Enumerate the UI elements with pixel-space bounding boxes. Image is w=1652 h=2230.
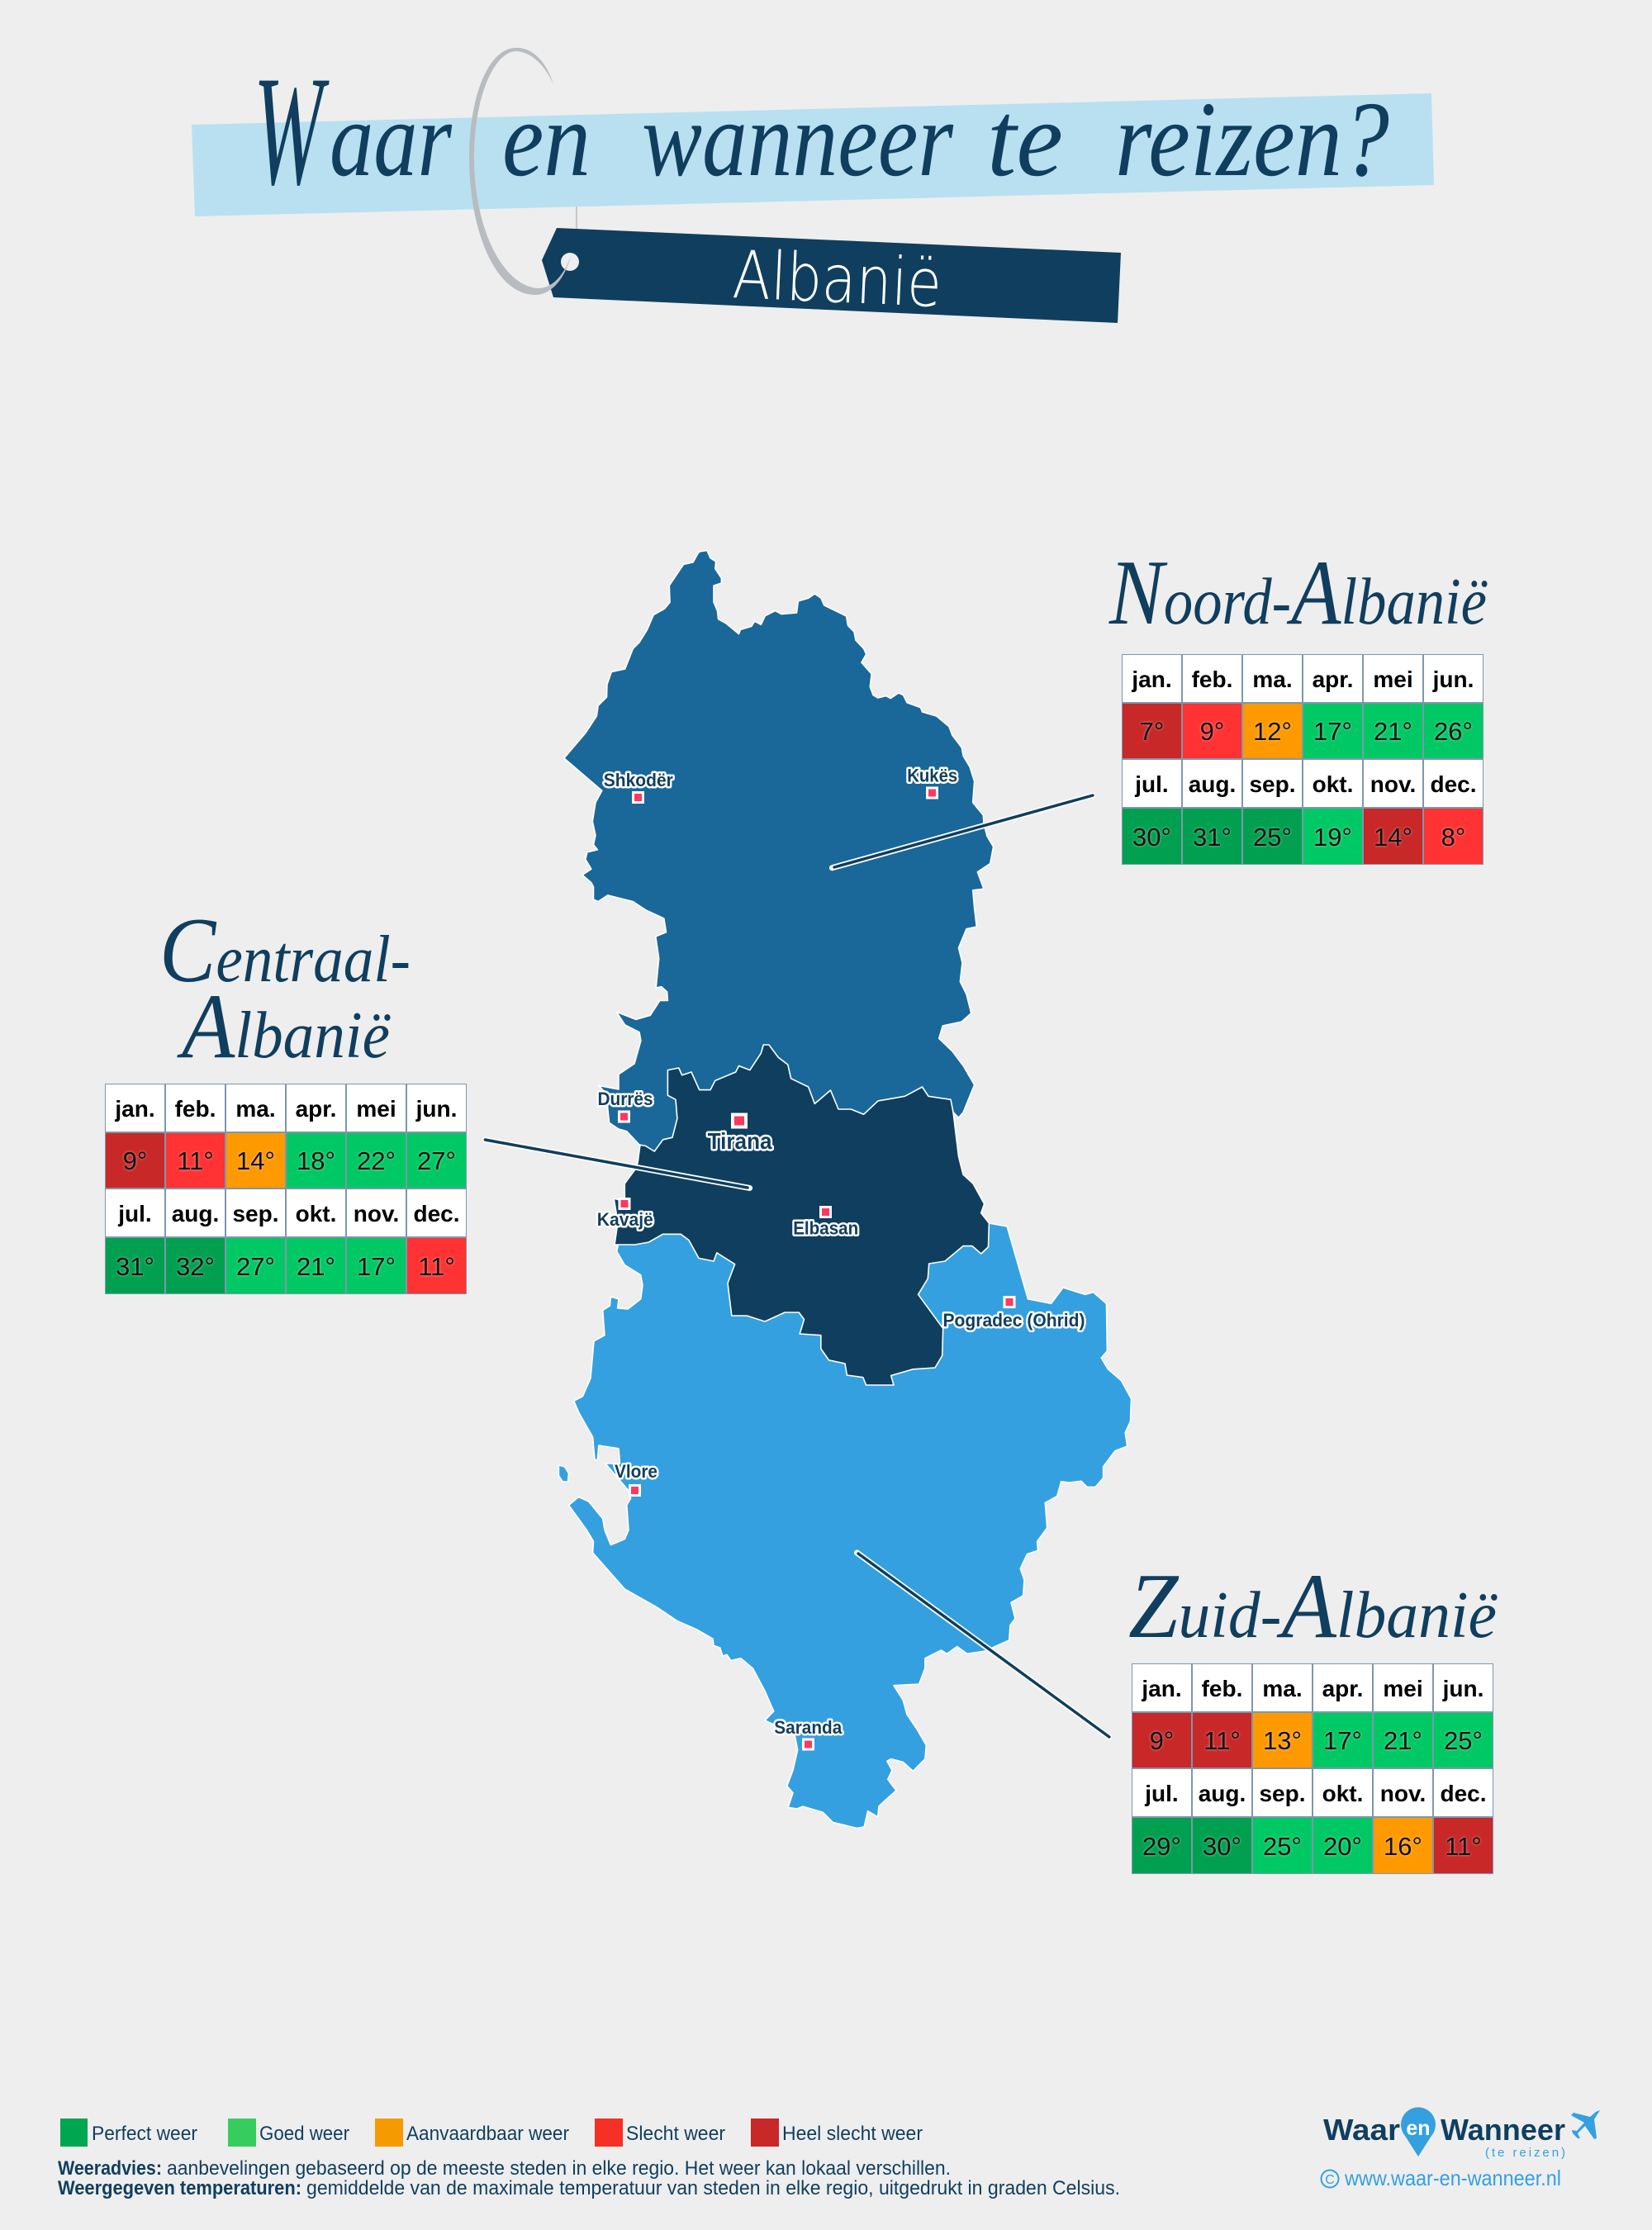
logo: Waar [1323,2113,1400,2147]
table: Centraal-Albanië: jul. [118,1201,152,1226]
city: Vlore: Vlore [615,1461,657,1482]
title banner: en [502,80,591,199]
table: Noord-Albanië: 30° [1132,823,1171,851]
table: Zuid-Albanië: okt. [1322,1781,1363,1805]
table: Noord-Albanië: jul. [1135,771,1169,796]
table: Zuid-Albanië: 11° [1203,1726,1241,1755]
city: Durrës: Durrës [598,1089,653,1109]
table: Centraal-Albanië: 17° [357,1252,396,1280]
legend item: acceptable [375,2118,569,2147]
table: Zuid-Albanië: dec. [1440,1781,1487,1805]
table: Centraal-Albanië: 27° [417,1146,456,1175]
legend item: acceptable: Aanvaardbaar weer [406,2123,569,2145]
city: Elbasan [793,1206,858,1239]
table: Noord-Albanië: nov. [1370,771,1416,796]
city: Durrës [598,1089,653,1123]
table: Noord-Albanië: ma. [1252,666,1293,692]
legend item: bad [595,2118,725,2147]
logo [1323,2107,1600,2160]
table: Noord-Albanië [1122,654,1483,865]
city: Saranda [774,1717,843,1751]
legend item: perfect: Perfect weer [92,2123,197,2145]
table: Centraal-Albanië: 32° [176,1252,215,1280]
leader line: south [857,1553,1109,1737]
legend item: perfect [60,2118,197,2147]
table: Centraal-Albanië: 27° [236,1252,275,1280]
table: Zuid-Albanië: nov. [1380,1781,1426,1805]
website: C [1325,2173,1335,2187]
table: Noord-Albanië: dec. [1430,771,1477,796]
heading: Centraal-Albanië [159,899,411,1078]
legend item: bad: Slecht weer [626,2123,725,2145]
table: Zuid-Albanië: 11° [1445,1832,1482,1860]
table: Noord-Albanië: 21° [1374,717,1412,746]
table: Noord-Albanië: jan. [1132,666,1172,692]
table: Zuid-Albanië: 9° [1150,1726,1174,1755]
icon: plane [1571,2110,1600,2139]
table: Centraal-Albanië: sep. [232,1201,279,1226]
table: Noord-Albanië: 9° [1200,717,1224,746]
table: Noord-Albanië: feb. [1192,666,1232,692]
region: north [564,550,994,1151]
city: Pogradec (Ohrid): Pogradec (Ohrid) [943,1310,1085,1331]
table: Zuid-Albanië: jun. [1443,1675,1483,1701]
heading: Centraal-Albanië: Centraal- [159,899,411,1002]
city: Shkodër [604,770,673,804]
legend [60,2118,923,2147]
heading: Zuid-Albanië: Zuid-Albanië [1128,1555,1498,1658]
table: Zuid-Albanië: ma. [1262,1675,1303,1701]
table: Centraal-Albanië: 14° [236,1146,275,1175]
heading: Centraal-Albanië: Albanië [176,975,391,1078]
table: Zuid-Albanië: mei [1383,1675,1423,1701]
table: Zuid-Albanië: 16° [1384,1832,1422,1860]
table: Centraal-Albanië: mei [356,1095,396,1122]
table: Noord-Albanië: 14° [1374,823,1412,851]
leader line: north [832,795,1093,868]
title banner [192,45,1434,218]
legend item: very bad: Heel slecht weer [782,2123,923,2145]
city: Kukës [907,765,957,799]
legend item: very bad [751,2118,923,2147]
title banner: reizen? [1115,80,1389,199]
table: Zuid-Albanië [1132,1663,1493,1874]
city: Elbasan: Elbasan [793,1217,858,1239]
table: Noord-Albanië: apr. [1313,666,1353,692]
city: Kukës: Kukës [907,765,957,786]
table: Centraal-Albanië: jun. [416,1095,457,1122]
table: Noord-Albanië: 17° [1313,717,1352,746]
table: Zuid-Albanië: jul. [1145,1781,1179,1805]
table: Centraal-Albanië: ma. [235,1095,276,1122]
table: Centraal-Albanië: 21° [297,1252,335,1280]
logo: Wanneer [1441,2113,1565,2147]
table: Zuid-Albanië: 29° [1142,1832,1181,1860]
table: Noord-Albanië: 8° [1441,823,1465,851]
table: Zuid-Albanië: 25° [1444,1726,1483,1755]
notes: Weergegeven temperaturen: [58,2177,301,2199]
table: Noord-Albanië: sep. [1249,771,1296,796]
table: Centraal-Albanië: 31° [116,1252,154,1280]
icon: map pin [1401,2107,1436,2156]
table: Zuid-Albanië: 30° [1203,1832,1241,1860]
table: Zuid-Albanië: 17° [1323,1726,1362,1755]
table: Noord-Albanië: mei [1373,666,1413,692]
map of Albania [558,550,1132,1829]
notes: aanbevelingen gebaseerd op de meeste steden in elke regio. Het weer kan lokaal verschillen. [167,2157,951,2180]
country tag: Albanië [731,236,943,322]
table: Centraal-Albanië: 11° [418,1252,455,1280]
leader line: central [485,1140,750,1188]
table: Noord-Albanië: 26° [1434,717,1473,746]
table: Zuid-Albanië: feb. [1202,1675,1242,1701]
table: Zuid-Albanië: jan. [1142,1675,1182,1701]
title banner: W [254,45,330,218]
notes [58,2157,1120,2199]
table: Noord-Albanië: 31° [1193,823,1232,851]
table: Centraal-Albanië: aug. [172,1201,219,1226]
title banner: te [987,80,1063,199]
table: Zuid-Albanië: 25° [1263,1832,1302,1860]
table: Centraal-Albanië: okt. [296,1201,336,1226]
city: Kavajë: Kavajë [597,1209,653,1230]
table: Centraal-Albanië: dec. [413,1201,460,1226]
notes: Weeradvies: [58,2157,162,2180]
region: central [614,1032,989,1385]
table: Centraal-Albanië: nov. [354,1201,399,1226]
table: Centraal-Albanië: apr. [296,1095,336,1122]
city: Kavajë [597,1198,653,1230]
table: Noord-Albanië: 19° [1313,823,1352,851]
notes: gemiddelde van de maximale temperatuur van steden in elke regio, uitgedrukt in graden Celsius. [306,2177,1120,2199]
city: Tirana: Tirana [708,1128,772,1154]
table: Zuid-Albanië: sep. [1259,1781,1306,1805]
table: Centraal-Albanië: 11° [177,1146,214,1175]
title banner: aar [330,80,452,199]
table: Noord-Albanië: okt. [1313,771,1353,796]
table: Centraal-Albanië: 22° [357,1146,396,1175]
city: Pogradec (Ohrid) [943,1296,1085,1331]
table: Centraal-Albanië: 18° [297,1146,335,1175]
table: Noord-Albanië: 12° [1253,717,1292,746]
table: Centraal-Albanië: jan. [115,1095,155,1122]
table: Zuid-Albanië: 21° [1384,1726,1422,1755]
legend item: good [228,2118,349,2147]
city: Shkodër: Shkodër [604,770,673,790]
region: south [558,1214,1132,1829]
table: Noord-Albanië: aug. [1189,771,1236,796]
table: Zuid-Albanië: apr. [1322,1675,1363,1701]
table: Noord-Albanië: 7° [1140,717,1164,746]
table: Noord-Albanië: 25° [1253,823,1292,851]
table: Zuid-Albanië: aug. [1199,1781,1246,1805]
title banner: wanneer [642,80,953,199]
table: Zuid-Albanië: 13° [1263,1726,1302,1755]
logo: en [1406,2117,1431,2140]
tag string ring [469,48,571,295]
table: Centraal-Albanië [105,1084,467,1294]
table: Centraal-Albanië: 9° [123,1146,147,1175]
heading: Noord-Albanië: Noord-Albanië [1108,542,1488,644]
city: Tirana [708,1113,772,1154]
legend item: good: Goed weer [259,2123,349,2145]
table: Noord-Albanië: jun. [1433,666,1474,692]
website: www.waar-en-wanneer.nl [1344,2166,1561,2190]
city: Vlore [615,1461,657,1497]
table: Zuid-Albanië: 20° [1323,1832,1362,1860]
table: Centraal-Albanië: feb. [175,1095,216,1122]
logo: (te reizen) [1485,2146,1565,2160]
city: Saranda: Saranda [774,1717,843,1738]
country tag [542,206,1121,323]
